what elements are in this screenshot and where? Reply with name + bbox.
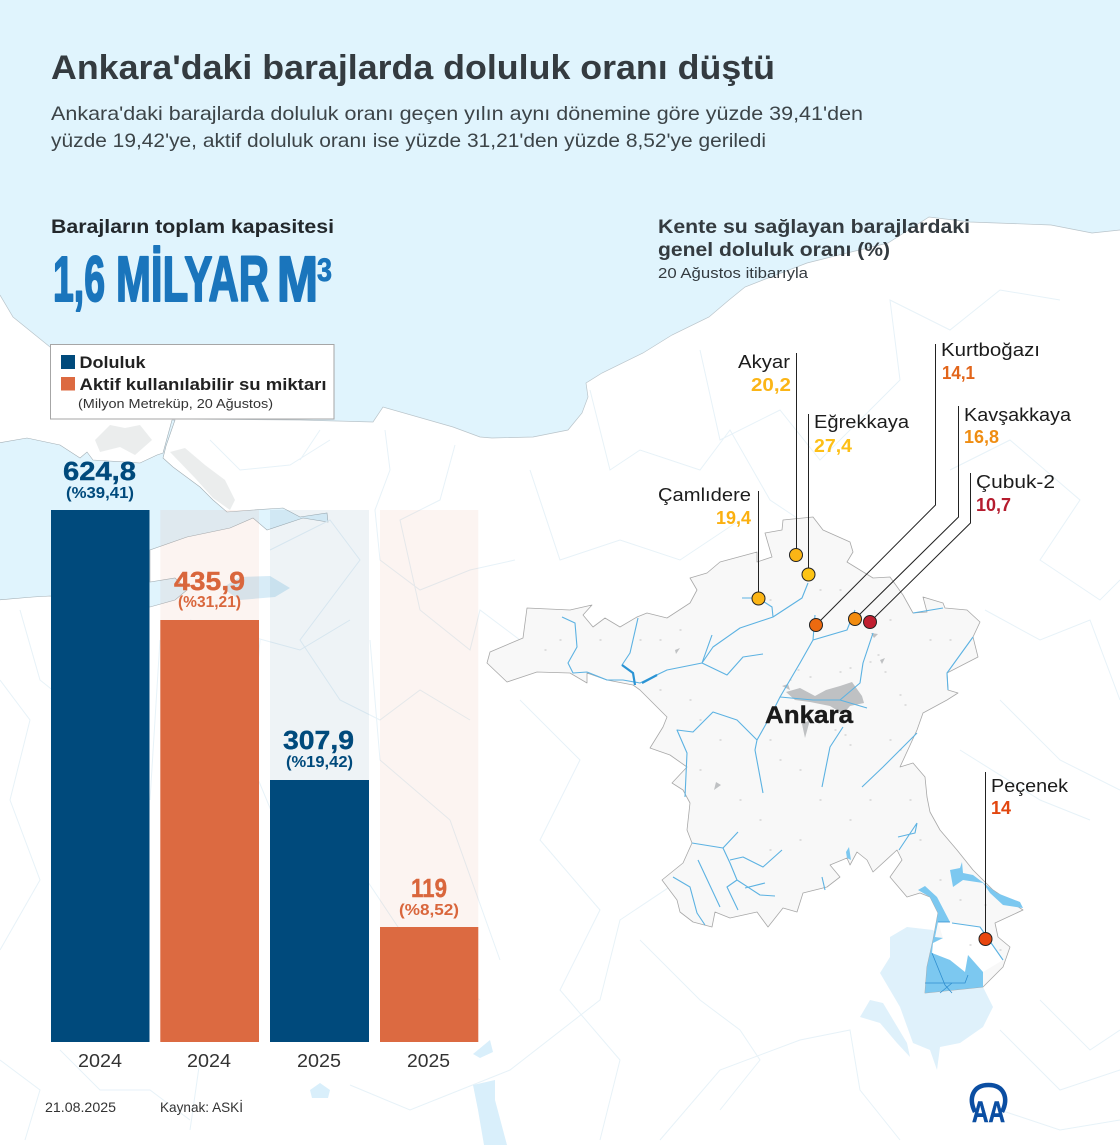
legend: (Milyon Metreküp, 20 Ağustos): [78, 396, 273, 411]
bar: 2025 doluluk: [270, 725, 369, 1071]
dam: Çubuk-2: [864, 472, 1055, 628]
map heading: Kente su sağlayan barajlardaki: [658, 217, 970, 238]
icon: AA logo: [972, 1085, 1005, 1129]
bar: 2024 aktif: 2024: [187, 1051, 231, 1071]
map heading: genel doluluk oranı (%): [658, 240, 890, 261]
white area south-east of province: [932, 922, 1003, 972]
bar: 2024 doluluk: [51, 456, 150, 1071]
rivers: [562, 583, 1003, 960]
bar: 2025 aktif: 2025: [407, 1051, 450, 1071]
dam: Eğrekkaya: Eğrekkaya: [814, 412, 910, 432]
dam: Peçenek: [979, 772, 1069, 946]
dam: Kavşakkaya: [848, 405, 1072, 626]
map: Ankara province: [487, 517, 1023, 1070]
bar: 2025 aktif: 119: [411, 873, 447, 903]
legend: Aktif kullanılabilir su miktarı: [80, 375, 326, 394]
bar: 2025 aktif: (%8,52): [399, 902, 459, 919]
map heading: 20 Ağustos itibarıyla: [658, 266, 809, 282]
dam: Peçenek: 14: [991, 798, 1011, 818]
dam: Akyar: Akyar: [738, 352, 790, 372]
ghost bars: [160, 510, 478, 927]
icon: AA logo: AA: [972, 1096, 1005, 1129]
heading: total capacity: Barajların toplam kapasitesi: [51, 216, 334, 238]
dam: Kavşakkaya: Kavşakkaya: [964, 405, 1072, 425]
bar: 2025 aktif: [380, 873, 478, 1071]
map heading: [658, 217, 970, 282]
dam: Kurtboğazı: 14,1: [942, 363, 975, 383]
bar: 2024 doluluk: (%39,41): [66, 485, 134, 502]
title: Ankara'daki barajlarda doluluk oranı düştü: [51, 49, 775, 87]
big number: capacity: MİLYAR: [116, 243, 269, 315]
dam: Çubuk-2: Çubuk-2: [976, 472, 1055, 492]
bar: 2025 doluluk: 307,9: [283, 725, 354, 755]
dam: Çamlıdere: 19,4: [716, 508, 751, 528]
bar: 2025 doluluk: (%19,42): [286, 754, 353, 771]
dam: Çamlıdere: Çamlıdere: [658, 485, 751, 505]
dam: Akyar: 20,2: [751, 375, 791, 395]
lakes: [846, 847, 1023, 993]
dam: Eğrekkaya: 27,4: [814, 436, 852, 456]
dam: Kavşakkaya: 16,8: [964, 427, 999, 447]
bar: 2024 aktif: [160, 566, 259, 1071]
province outline: [487, 517, 1023, 993]
bar: 2025 doluluk: 2025: [297, 1051, 341, 1071]
subtitle: Ankara'daki barajlarda doluluk oranı geçen yılın aynı dönemine göre yüzde 39,41'den: [51, 103, 863, 125]
big number: capacity: M: [277, 243, 318, 315]
city label: Ankara: Ankara: [765, 702, 854, 729]
subtitle: yüzde 19,42'ye, aktif doluluk oranı ise yüzde 31,21'den yüzde 8,52'ye geriledi: [51, 130, 766, 152]
footer source: Kaynak: ASKİ: [160, 1098, 243, 1115]
dam: Akyar: [738, 352, 802, 562]
urban area of Ankara: [675, 633, 885, 790]
dam: Çubuk-2: 10,7: [976, 495, 1011, 515]
legend: [50, 344, 334, 419]
subtitle: [51, 103, 863, 152]
big number: capacity: 1,6: [53, 243, 105, 315]
dam: Kurtboğazı: Kurtboğazı: [941, 340, 1040, 360]
bar chart: [51, 456, 478, 1071]
dam: Kurtboğazı: [810, 340, 1040, 632]
dam: Peçenek: Peçenek: [991, 776, 1069, 796]
dam: Eğrekkaya: [802, 412, 910, 581]
big number: capacity: 3: [317, 252, 332, 288]
pale lake south of province: [860, 927, 993, 1070]
bar: 2024 aktif: 435,9: [174, 566, 245, 596]
bar: 2024 aktif: (%31,21): [178, 594, 241, 611]
bar: 2024 doluluk: 624,8: [63, 456, 136, 486]
footer date: 21.08.2025: [45, 1099, 116, 1115]
bar: 2024 doluluk: 2024: [78, 1051, 122, 1071]
scattered settlements: [545, 590, 1001, 950]
legend: Doluluk: [80, 353, 146, 372]
dam: Çamlıdere: [658, 485, 765, 605]
